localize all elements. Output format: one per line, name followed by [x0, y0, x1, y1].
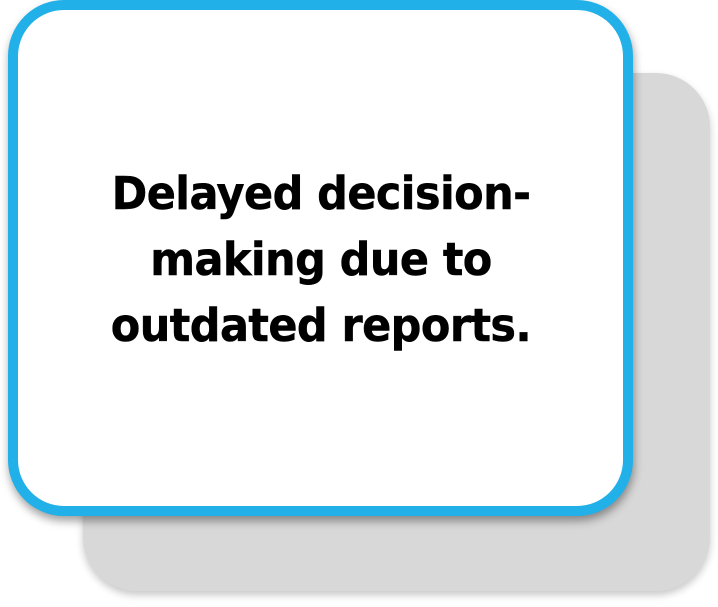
text block: main message: [111, 167, 531, 352]
panel: grey back card: [83, 73, 710, 591]
text block: main message: Delayed decision-: [112, 167, 530, 220]
panel: white front card with blue border: [8, 0, 633, 516]
text block: main message: making due to: [150, 233, 492, 286]
text block: main message: outdated reports.: [111, 299, 531, 352]
